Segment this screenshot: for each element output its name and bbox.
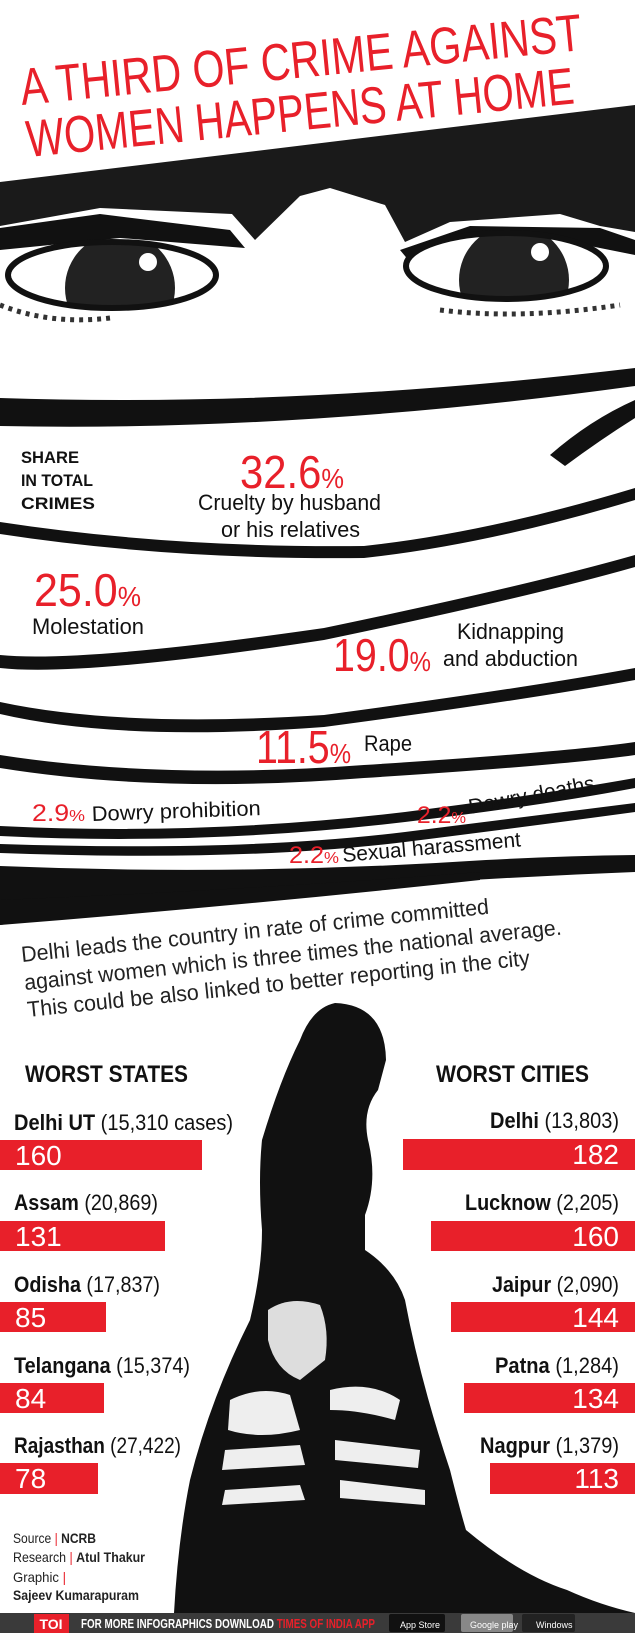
worst states: WORST STATES [25, 1061, 188, 1088]
stat: rape: 11.5% [256, 721, 351, 773]
stat: kidnapping: and abduction [443, 646, 578, 671]
stat: dowry deaths: Dowry deaths [467, 772, 597, 819]
footer bar: FOR MORE INFOGRAPHICS DOWNLOAD TIMES OF INDIA APP [81, 1616, 375, 1631]
stat: molestation: Molestation [32, 614, 144, 639]
worst cities: Jaipur (2,090) [492, 1272, 619, 1297]
worst cities: 113 [574, 1463, 619, 1494]
stat: cruelty: or his relatives [221, 517, 360, 542]
worst cities: Lucknow (2,205) [465, 1190, 619, 1215]
worst states: 78 [15, 1463, 46, 1494]
stat: cruelty: 32.6% [240, 446, 344, 498]
worst states: Assam (20,869) [14, 1190, 158, 1215]
worst states: 131 [15, 1221, 62, 1252]
share label [21, 448, 95, 513]
worst states: Rajasthan (27,422) [14, 1433, 181, 1458]
stat: sexual harassment: Sexual harassment [341, 828, 522, 867]
credits: Source | NCRB [13, 1530, 96, 1546]
worst cities: Nagpur (1,379) [480, 1433, 619, 1458]
worst cities: WORST CITIES [436, 1061, 589, 1088]
worst cities: 144 [572, 1302, 619, 1333]
paragraph [20, 894, 563, 1022]
worst cities: 134 [572, 1383, 619, 1414]
stat: dowry prohibition: 2.9% [32, 800, 85, 827]
worst states: 160 [15, 1140, 62, 1171]
illustration: stripes [0, 488, 635, 925]
footer bar: Windows [536, 1620, 573, 1630]
share label: SHARE [21, 448, 79, 467]
footer bar [0, 1613, 635, 1633]
paragraph: Delhi leads the country in rate of crime committed [20, 894, 490, 967]
stat: sexual harassment: 2.2% [289, 842, 339, 869]
worst states: Delhi UT (15,310 cases) [14, 1110, 233, 1135]
paragraph: This could be also linked to better reporting in the city [26, 945, 531, 1022]
stat: kidnapping: Kidnapping [457, 619, 564, 644]
share label: IN TOTAL [21, 471, 93, 490]
stat: kidnapping [333, 619, 578, 681]
footer bar: TOI [39, 1616, 63, 1632]
worst states [0, 1061, 233, 1494]
footer bar: Google play [470, 1620, 519, 1630]
stat: molestation: 25.0% [34, 564, 141, 616]
credits [13, 1530, 145, 1603]
stat: rape [256, 721, 412, 773]
worst cities: Delhi (13,803) [490, 1108, 619, 1133]
worst states: Odisha (17,837) [14, 1272, 160, 1297]
footer bar: App Store [400, 1620, 440, 1630]
paragraph: against women which is three times the national average. [23, 915, 563, 995]
credits: Research | Atul Thakur [13, 1549, 145, 1565]
stat: cruelty: Cruelty by husband [198, 490, 381, 515]
stat: kidnapping: 19.0% [333, 629, 431, 681]
worst cities: 160 [572, 1221, 619, 1252]
stat: dowry deaths: 2.2% [417, 802, 466, 829]
credits: Graphic | [13, 1569, 66, 1585]
stat: dowry prohibition: Dowry prohibition [91, 797, 261, 826]
worst states: Telangana (15,374) [14, 1353, 190, 1378]
worst cities: Patna (1,284) [495, 1353, 619, 1378]
worst cities: 182 [572, 1139, 619, 1170]
stat: cruelty [198, 446, 381, 542]
stat: rape: Rape [364, 731, 412, 756]
illustration: eyes [0, 105, 635, 466]
worst states: 84 [15, 1383, 46, 1414]
silhouette [174, 1003, 635, 1613]
worst states: 85 [15, 1302, 46, 1333]
worst cities [403, 1061, 635, 1494]
stat: dowry prohibition [32, 797, 261, 827]
share label: CRIMES [21, 494, 95, 513]
stat: molestation [32, 564, 144, 639]
credits: Sajeev Kumarapuram [13, 1587, 139, 1603]
stat: dowry deaths [417, 772, 597, 829]
